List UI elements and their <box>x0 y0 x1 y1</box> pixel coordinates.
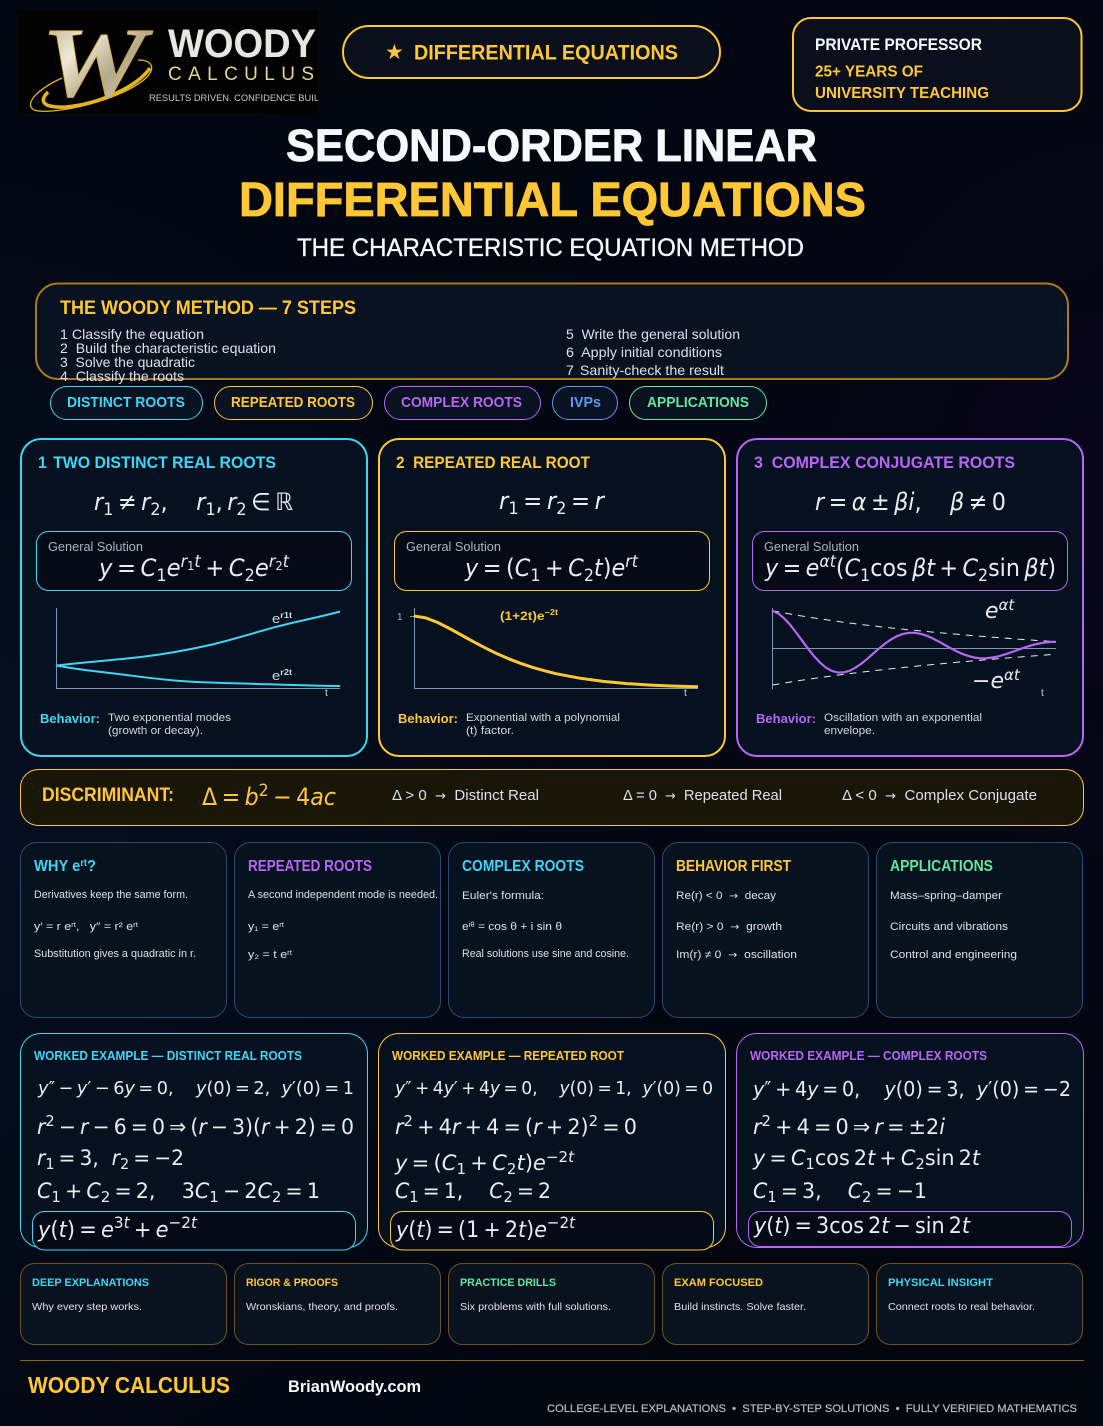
logo: Woody Calculus <box>18 7 319 118</box>
credential name: PRIVATE PROFESSOR <box>815 36 982 54</box>
constants: C <box>195 1179 210 1203</box>
final solution: −2t <box>547 1213 575 1232</box>
final solution: 3t <box>114 1213 130 1232</box>
step 4: 4 Classify the roots <box>60 368 184 384</box>
panel: why e^rt <box>20 842 226 1018</box>
root condition: = <box>566 487 595 515</box>
curve label: lower envelope: αt <box>1004 666 1021 684</box>
curve: oscillation <box>772 611 1056 672</box>
final solution: −2t <box>169 1213 197 1232</box>
chart: exponential modes <box>56 608 340 699</box>
curve label: (1+2t)e <box>500 609 539 623</box>
heading: REPEATED ROOTS <box>248 858 372 875</box>
general form: t <box>972 1146 981 1170</box>
constants: = 3, <box>777 1179 848 1203</box>
panel: applications <box>876 842 1082 1018</box>
general form: C <box>492 1151 507 1175</box>
root condition: ≠ <box>113 488 141 516</box>
feature: deep explanations <box>20 1264 226 1344</box>
behavior text line 2: (growth or decay). <box>108 725 203 737</box>
result box <box>390 1212 714 1250</box>
root condition: r <box>196 488 208 516</box>
curve label: growth: r1t <box>280 611 292 620</box>
heading: WORKED EXAMPLE — COMPLEX ROOTS <box>750 1049 987 1063</box>
footer tagline: COLLEGE-LEVEL EXPLANATIONS • STEP-BY-STEP SOLUTIONS • FULLY VERIFIED MATHEMATICS <box>547 1403 1077 1415</box>
general solution formula: y = (C <box>465 554 531 582</box>
feature heading: DEEP EXPLANATIONS <box>32 1277 149 1289</box>
case: zero: Δ = 0 → Repeated Real <box>623 787 782 804</box>
general solution formula: r <box>269 552 276 572</box>
pill: applications: APPLICATIONS <box>647 394 749 411</box>
constants: C <box>257 1179 272 1203</box>
root condition: 1 <box>508 499 519 519</box>
behavior note: Behavior: <box>398 711 458 726</box>
heading: BEHAVIOR FIRST <box>676 858 791 875</box>
curve label: upper envelope: e <box>985 599 999 624</box>
general solution formula: y = e <box>765 554 820 582</box>
body line 2: y′ = r e <box>34 921 67 933</box>
constants: = 2 <box>513 1179 551 1203</box>
feature heading: PRACTICE DRILLS <box>460 1277 556 1289</box>
panel: behavior first <box>662 842 868 1018</box>
heading: COMPLEX ROOTS <box>462 858 584 875</box>
roots: 1 <box>45 1155 55 1173</box>
heading: ? <box>87 858 96 875</box>
constants: 1 <box>409 1188 419 1206</box>
curve label: upper envelope: αt <box>999 596 1015 614</box>
behavior text line 2: envelope. <box>824 725 875 737</box>
general solution formula: αt <box>819 552 837 572</box>
behavior note <box>398 711 620 737</box>
heading: WHY e <box>34 858 84 875</box>
general solution formula: rt <box>625 552 639 572</box>
body line 2: y₁ = e <box>248 921 276 933</box>
final solution: y(t) = (1 + 2t)e <box>396 1218 548 1243</box>
panel: discriminant <box>20 770 1084 826</box>
body line 3: Substitution gives a quadratic in r. <box>34 948 196 960</box>
axis label: t <box>1041 688 1044 699</box>
body line 2: rt <box>71 922 76 929</box>
feature text: Build instincts. Solve faster. <box>674 1301 806 1313</box>
card heading: 3 COMPLEX CONJUGATE ROOTS <box>754 453 1015 472</box>
root condition: r <box>499 487 510 515</box>
body line 3: Im(r) ≠ 0 → oscillation <box>676 949 797 961</box>
pill: distinct roots <box>50 386 202 420</box>
feature text: Why every step works. <box>32 1301 142 1313</box>
step 3: 3 Solve the quadratic <box>60 354 195 370</box>
curve: decay <box>56 666 340 686</box>
general form: + <box>466 1151 492 1175</box>
chart: polynomial decay <box>397 608 698 699</box>
pill: IVPs: IVPs <box>570 394 601 411</box>
case: positive: Δ > 0 → Distinct Real <box>392 787 539 804</box>
pill: distinct roots: DISTINCT ROOTS <box>67 394 185 411</box>
general form: 2 <box>915 1155 925 1173</box>
equation and initial conditions: y″ − y′ − 6y = 0, y(0) = 2, y′(0) = 1 <box>37 1078 354 1099</box>
general form: cos 2 <box>815 1146 867 1170</box>
body line 1: Derivatives keep the same form. <box>34 889 188 901</box>
body line 2: iθ <box>469 922 475 929</box>
body line 1: A second independent mode is needed. <box>248 889 438 901</box>
body line 1: Mass–spring–damper <box>890 890 1002 902</box>
root condition: , <box>216 488 227 516</box>
roots: = 3, <box>55 1146 112 1170</box>
pill: applications <box>630 386 766 420</box>
general solution formula: + <box>201 554 229 582</box>
constants: = 1, <box>419 1179 489 1203</box>
characteristic equation: r + 4 = (r + 2) <box>452 1115 589 1139</box>
logo subtitle: CALCULUS <box>168 64 314 85</box>
characteristic equation: + 4 <box>413 1115 452 1139</box>
root condition: r <box>94 488 105 516</box>
navigation pills <box>50 386 766 420</box>
envelope: upper and lower <box>772 611 1055 685</box>
root condition: r <box>227 488 239 516</box>
discriminant label: DISCRIMINANT: <box>42 785 174 806</box>
characteristic equation: r <box>395 1115 405 1139</box>
general solution formula: C <box>229 554 245 582</box>
general solution formula: 1 <box>860 566 870 586</box>
final solution: y(t) = 3cos 2t − sin 2t <box>753 1214 971 1239</box>
roots: r <box>112 1146 121 1170</box>
behavior text line 2: (t) factor. <box>466 725 514 737</box>
body line 3: Real solutions use sine and cosine. <box>462 948 629 960</box>
constants: C <box>848 1179 862 1203</box>
feature: exam focused <box>662 1264 868 1344</box>
constants: 2 <box>101 1188 110 1206</box>
characteristic equation: 2 <box>762 1112 771 1130</box>
roots: = −2 <box>129 1146 184 1170</box>
body line 2: Re(r) > 0 → growth <box>676 921 782 933</box>
feature heading: EXAM FOCUSED <box>674 1277 763 1289</box>
general solution formula: ( <box>836 554 845 582</box>
icon: star: ★ <box>385 40 404 64</box>
title <box>239 120 866 262</box>
subtitle: THE CHARACTERISTIC EQUATION METHOD <box>297 234 804 262</box>
feature text: Wronskians, theory, and proofs. <box>246 1301 398 1313</box>
feature: practice drills <box>448 1264 654 1344</box>
general form: 2 <box>507 1160 516 1178</box>
general solution formula: e <box>167 554 181 582</box>
heading: WORKED EXAMPLE — DISTINCT REAL ROOTS <box>34 1049 302 1063</box>
general solution box <box>394 532 710 590</box>
pill: repeated roots: REPEATED ROOTS <box>231 394 355 411</box>
panel: repeated real root <box>379 439 725 756</box>
constants: 2 <box>862 1188 871 1206</box>
footer website: BrianWoody.com <box>288 1377 421 1396</box>
behavior text line 1: Exponential with a polynomial <box>466 712 620 724</box>
chart: damped oscillation <box>772 596 1056 699</box>
root condition: r <box>547 487 558 515</box>
body line 2: = cos θ + i sin θ <box>475 921 562 933</box>
general solution formula: )e <box>603 554 626 582</box>
general solution formula: 2 <box>275 559 283 573</box>
constants: C <box>753 1179 768 1203</box>
constants: 1 <box>51 1188 61 1206</box>
step 6: 6 Apply initial conditions <box>566 344 722 360</box>
root condition: 2 <box>556 499 566 519</box>
pill: complex roots: COMPLEX ROOTS <box>401 394 522 411</box>
feature text: Six problems with full solutions. <box>460 1301 611 1313</box>
general solution formula: 1 <box>156 566 167 586</box>
body line 2: e <box>462 921 468 933</box>
general solution formula: 1 <box>187 559 194 573</box>
general form: sin 2 <box>925 1146 972 1170</box>
body line 1: Re(r) < 0 → decay <box>676 890 777 902</box>
constants: = 1 <box>281 1179 320 1203</box>
root condition: r <box>141 488 152 516</box>
constants: C <box>489 1179 504 1203</box>
panel: complex conjugate roots <box>737 439 1083 756</box>
body line 3: rt <box>287 950 292 957</box>
general form: 1 <box>805 1155 815 1173</box>
general solution formula: βt) <box>1024 554 1057 582</box>
behavior note <box>40 711 232 737</box>
behavior text line 1: Oscillation with an exponential <box>824 712 982 724</box>
panel: repeated roots note <box>234 842 440 1018</box>
case: negative: Δ < 0 → Complex Conjugate <box>842 787 1037 804</box>
root condition: = <box>519 487 547 515</box>
root condition: r <box>595 487 606 515</box>
final solution: e <box>156 1218 169 1243</box>
body line 1: Euler's formula: <box>462 890 544 902</box>
curve label: decay: e <box>272 668 279 683</box>
general solution formula: C <box>845 554 860 582</box>
general solution formula: e <box>255 554 269 582</box>
credentials box <box>793 18 1082 111</box>
discriminant formula: ac <box>310 783 336 811</box>
body line 2: rt <box>279 922 284 929</box>
general solution formula: cos <box>870 554 912 582</box>
step 7: 7 Sanity-check the result <box>566 362 724 378</box>
constants: − 2 <box>219 1179 257 1203</box>
general solution label: General Solution <box>406 540 501 554</box>
constants: 1 <box>767 1188 777 1206</box>
constants: C <box>86 1179 101 1203</box>
equation and initial conditions: y″ + 4y = 0, y(0) = 3, y′(0) = −2 <box>752 1077 1071 1101</box>
heading: APPLICATIONS <box>890 858 993 875</box>
root condition: , <box>161 488 196 516</box>
roots: 2 <box>120 1155 129 1173</box>
root condition: 2 <box>150 500 161 520</box>
general form: 1 <box>456 1160 466 1178</box>
general form: t <box>516 1151 525 1175</box>
general solution formula: t <box>283 552 290 572</box>
result box <box>32 1212 356 1250</box>
general solution formula: 2 <box>245 566 255 586</box>
curve label: decay: r2t <box>280 668 292 677</box>
characteristic equation: − <box>55 1115 80 1139</box>
general solution label: General Solution <box>48 540 143 554</box>
feature heading: RIGOR & PROOFS <box>246 1277 338 1289</box>
root condition: 1 <box>103 500 113 520</box>
characteristic equation: 2 <box>589 1112 598 1130</box>
final solution: y(t) = e <box>38 1218 115 1243</box>
general solution formula: r <box>181 552 188 572</box>
pill: complex roots <box>384 386 540 420</box>
step 5: 5 Write the general solution <box>566 326 740 342</box>
constants: = 2, 3 <box>110 1179 195 1203</box>
general solution formula: t <box>194 552 202 572</box>
step 1: 1 Classify the equation <box>60 326 204 342</box>
characteristic equation: = 0 <box>598 1115 637 1139</box>
panel: worked example complex roots <box>736 1034 1084 1248</box>
general form: t + C <box>867 1146 916 1170</box>
discriminant formula: − 4 <box>269 783 310 811</box>
behavior note <box>756 711 982 737</box>
axis tick label: 1 <box>397 612 403 623</box>
title: SECOND-ORDER LINEAR <box>286 120 817 171</box>
feature: physical insight <box>876 1264 1082 1344</box>
general solution formula: 2 <box>584 566 594 586</box>
root condition: 1 <box>206 500 216 520</box>
panel: worked example distinct roots <box>20 1034 368 1250</box>
icon: gold swoosh <box>30 60 152 111</box>
constants: = −1 <box>871 1179 927 1203</box>
icon: W monogram: W <box>41 7 153 118</box>
general solution formula: y = C <box>99 554 157 582</box>
axis label: t <box>684 688 687 699</box>
heading: rt <box>80 858 88 869</box>
general solution formula: 1 <box>530 566 540 586</box>
feature: rigor and proofs <box>234 1264 440 1344</box>
constants: + <box>61 1179 86 1203</box>
credential years: 25+ YEARS OF <box>815 64 923 80</box>
constants: 1 <box>209 1188 219 1206</box>
characteristic equation: + 4 = 0 ⇒ <box>771 1115 874 1139</box>
general form: −2t <box>546 1148 574 1166</box>
pill: IVPs <box>552 386 618 420</box>
panel: worked example repeated root <box>378 1034 726 1250</box>
characteristic equation: r − 6 = 0 ⇒ (r − 3)(r + 2) = 0 <box>80 1115 356 1139</box>
result box <box>748 1212 1072 1246</box>
body line 3: y₂ = t e <box>248 949 283 961</box>
characteristic equation: 2 <box>45 1112 55 1130</box>
root condition: ∈ ℝ <box>247 488 293 516</box>
heading: WORKED EXAMPLE — REPEATED ROOT <box>392 1049 624 1063</box>
general form: y = (C <box>395 1151 456 1175</box>
curve label: growth: e <box>272 611 279 626</box>
axis label: t <box>325 688 328 699</box>
card heading: 2 REPEATED REAL ROOT <box>396 453 591 472</box>
general solution formula: βt + C <box>912 554 979 582</box>
general solution formula: t <box>594 554 604 582</box>
pill: repeated roots <box>214 386 372 420</box>
constants: C <box>395 1179 410 1203</box>
characteristic equation: r <box>753 1115 763 1139</box>
curve: growth <box>56 612 340 666</box>
general solution box <box>36 532 352 590</box>
behavior note: Behavior: <box>40 711 100 726</box>
characteristic equation: r = ±2i <box>874 1115 945 1139</box>
root condition: r = α ± βi, β ≠ 0 <box>815 488 1006 516</box>
curve: repeated root solution <box>414 616 698 687</box>
constants: 2 <box>503 1188 513 1206</box>
equation and initial conditions: y″ + 4y′ + 4y = 0, y(0) = 1, y′(0) = 0 <box>394 1078 713 1099</box>
logo tagline: RESULTS DRIVEN. CONFIDENCE BUIL <box>149 93 319 104</box>
body line 2: Circuits and vibrations <box>890 921 1009 933</box>
general solution formula: 2 <box>978 566 988 586</box>
body line 2: rt <box>133 922 138 929</box>
discriminant formula: 2 <box>259 781 269 801</box>
characteristic equation: r <box>37 1115 47 1139</box>
curve label: lower envelope: −e <box>972 669 1004 694</box>
general form: y = C <box>753 1146 806 1170</box>
general solution formula: sin <box>988 554 1024 582</box>
feature text: Connect roots to real behavior. <box>888 1301 1035 1313</box>
body line 2: , y″ = r² e <box>76 921 133 933</box>
body line 3: Control and engineering <box>890 949 1017 961</box>
general solution label: General Solution <box>764 540 859 554</box>
footer <box>28 1372 1077 1415</box>
behavior note: Behavior: <box>756 711 816 726</box>
footer brand: WOODY CALCULUS <box>28 1372 230 1398</box>
constants: C <box>37 1179 52 1203</box>
card heading: 1 TWO DISTINCT REAL ROOTS <box>38 453 276 472</box>
topic pill <box>343 26 720 78</box>
roots: r <box>37 1146 47 1170</box>
feature heading: PHYSICAL INSIGHT <box>888 1277 993 1289</box>
credential teaching: UNIVERSITY TEACHING <box>815 85 989 102</box>
curve label: −2t <box>545 608 558 617</box>
behavior text line 1: Two exponential modes <box>108 712 232 724</box>
general solution formula: C <box>568 554 584 582</box>
general form: )e <box>525 1151 546 1175</box>
pill text: DIFFERENTIAL EQUATIONS <box>414 42 678 64</box>
method heading: THE WOODY METHOD — 7 STEPS <box>60 297 356 319</box>
characteristic equation: 2 <box>404 1112 413 1130</box>
panel: two distinct real roots <box>21 439 367 756</box>
step 2: 2 Build the characteristic equation <box>60 340 276 356</box>
general solution formula: + <box>540 554 568 582</box>
discriminant formula: Δ = b <box>202 783 260 811</box>
root condition: 2 <box>237 500 247 520</box>
constants: 2 <box>272 1188 281 1206</box>
panel: the Woody method <box>36 284 1068 384</box>
final solution: + <box>130 1218 156 1243</box>
logo wordmark: WOODY <box>168 22 316 66</box>
title: accent line: DIFFERENTIAL EQUATIONS <box>239 174 866 227</box>
panel: complex roots note <box>448 842 654 1018</box>
general solution box <box>752 532 1068 590</box>
